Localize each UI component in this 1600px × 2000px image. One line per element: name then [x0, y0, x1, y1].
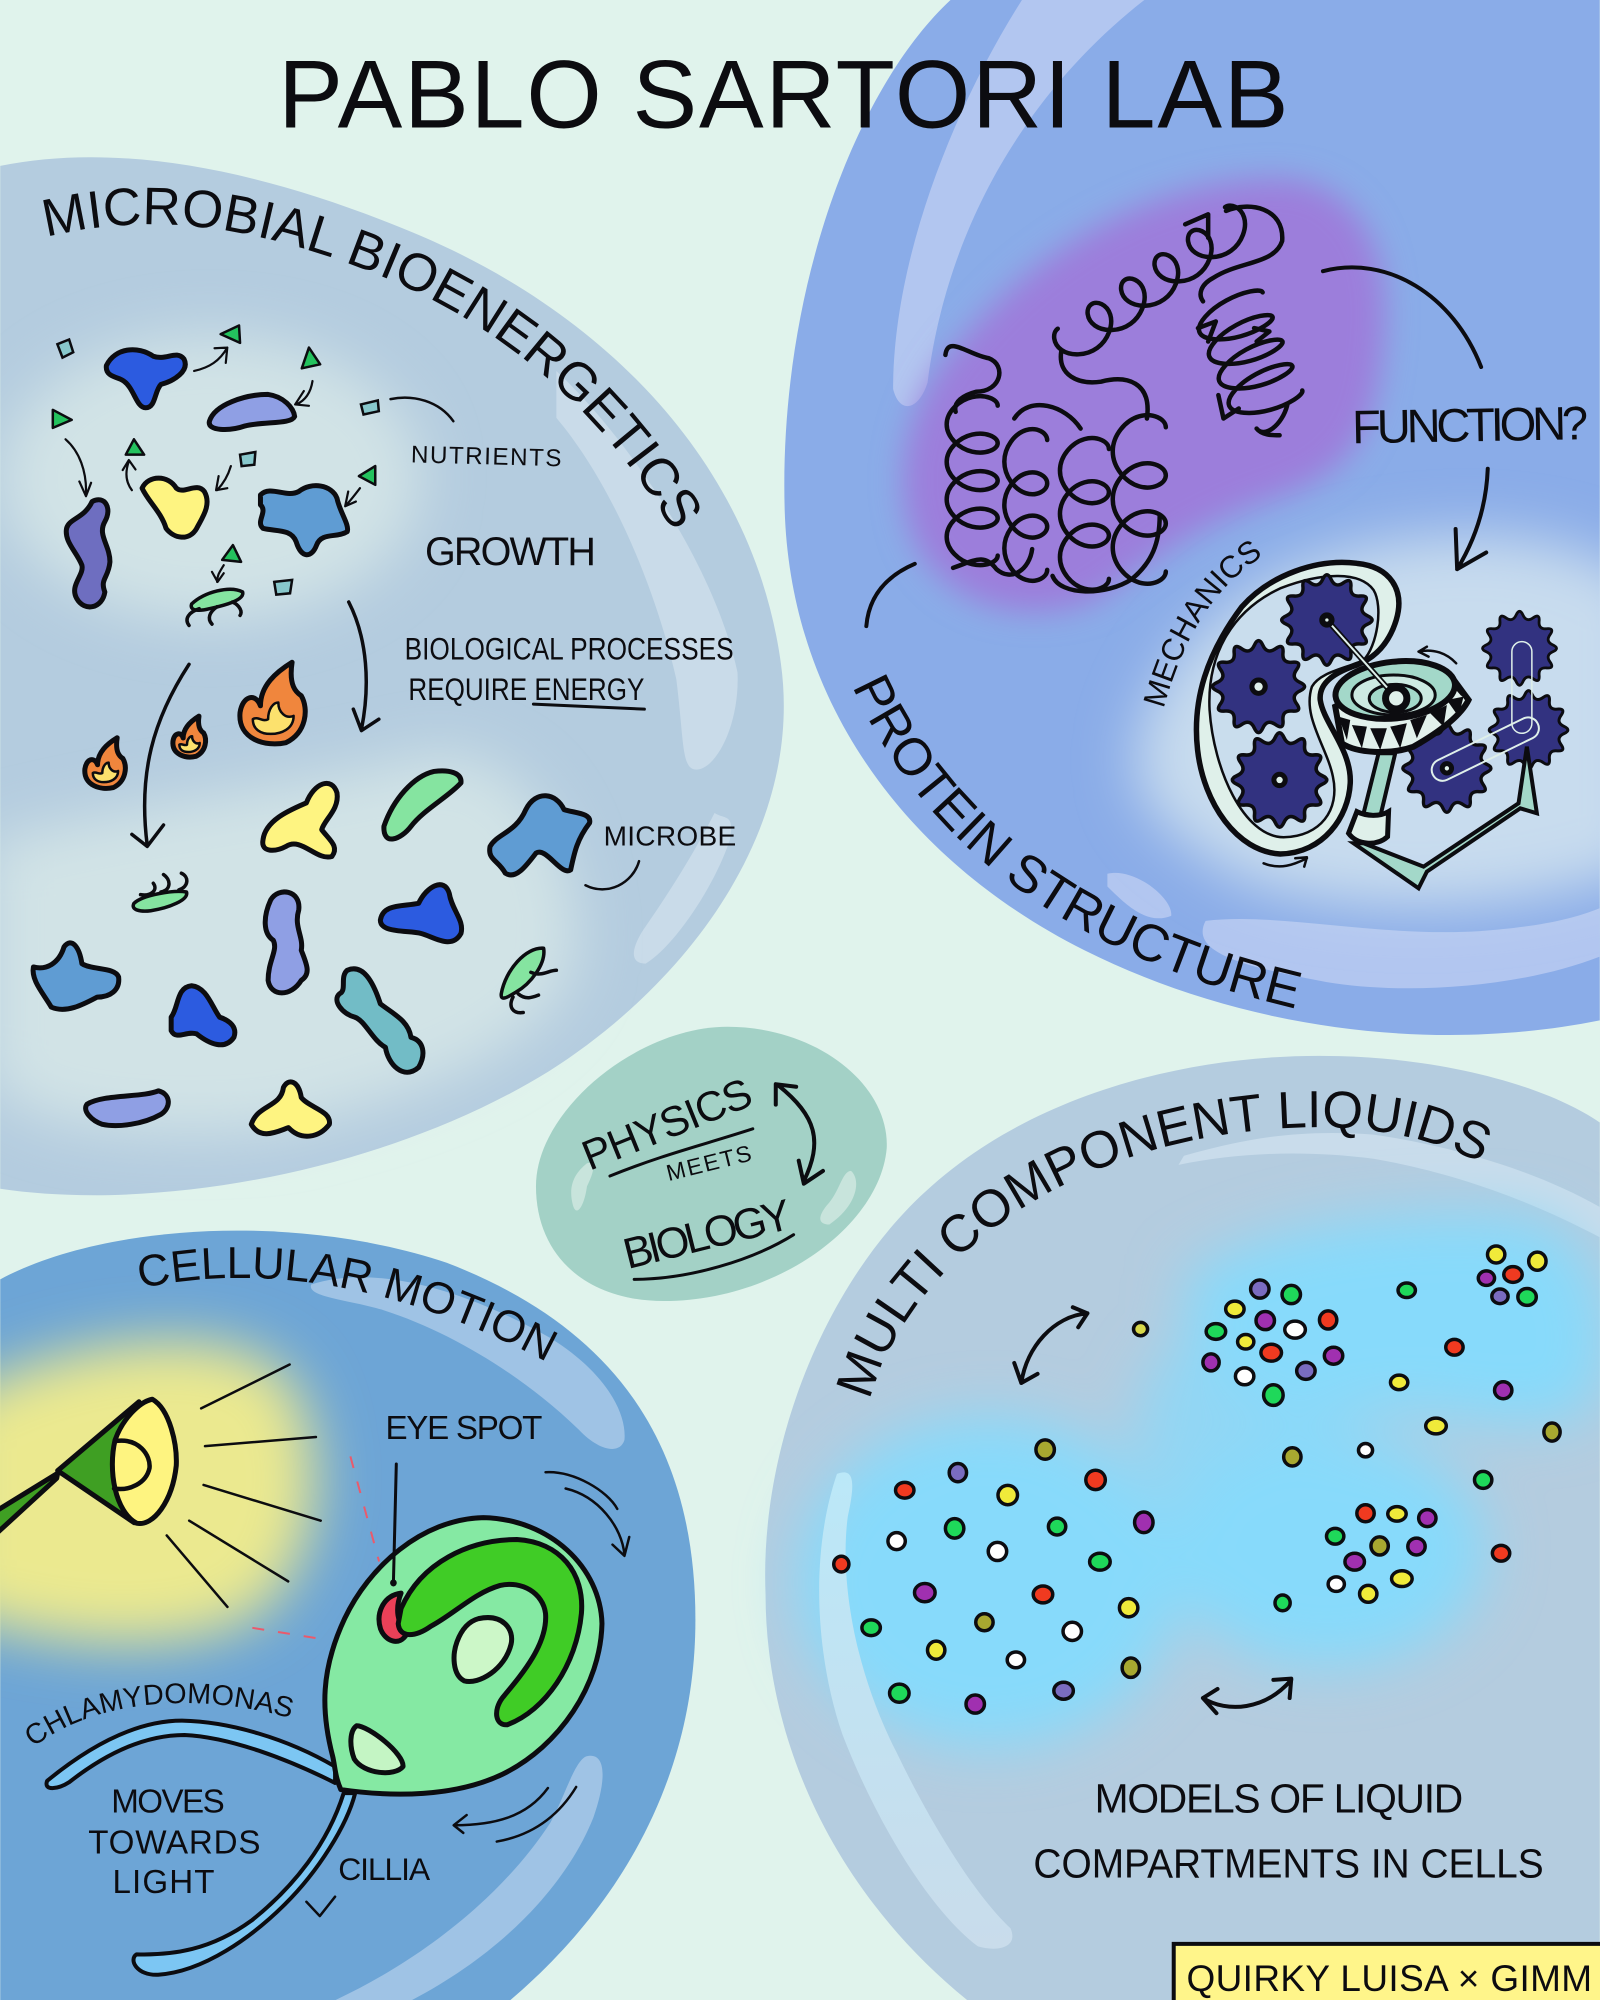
upper pale glow [0, 335, 421, 621]
crown gear rings [1352, 675, 1435, 715]
microbe: yellow lower [251, 1082, 330, 1136]
protein panel bubble [784, 0, 1600, 1035]
nucleus [454, 1618, 512, 1682]
red dashed light cone [252, 1456, 379, 1639]
arrow: energy to right colony [349, 602, 379, 731]
helix 1 [947, 396, 998, 565]
rod core [1327, 620, 1395, 697]
microbe: small green with legs [187, 589, 243, 625]
panel: microbial bioenergetics [0, 157, 784, 1196]
credit banner [1174, 1944, 1600, 2000]
helix 5 [1049, 201, 1256, 366]
label: mechanics: MECHANICS [1144, 541, 1260, 706]
eye spot pointer [393, 1464, 396, 1582]
gear 3 [1232, 733, 1327, 827]
gear 4 [1403, 724, 1491, 812]
panel: cellular motion [0, 1230, 696, 2000]
protein panel lower highlight [1107, 873, 1600, 988]
pin link diagonal [1428, 714, 1542, 784]
nutrients connector [391, 398, 453, 421]
dots: cluster upper right [1398, 1246, 1546, 1305]
microbe: dark blue lobed [380, 885, 462, 942]
centre highlights [571, 1163, 856, 1224]
microbe: large yellow [263, 783, 337, 857]
crown gear teeth base [1335, 675, 1469, 752]
small arrow lower [1264, 857, 1307, 867]
microbe: mid blue star [33, 943, 119, 1009]
gear 6 [1489, 691, 1568, 769]
mechanics machine illustration [1196, 562, 1568, 888]
double arrow lower [1203, 1679, 1291, 1713]
cellular highlights [311, 1277, 625, 2000]
linkage arms [1354, 747, 1537, 888]
flagellum left [46, 1721, 335, 1788]
arrow: function to mechanics top [1323, 267, 1481, 367]
microbe: dark blue blob [171, 986, 235, 1045]
title: PABLO SARTORI LAB [278, 40, 1289, 149]
panel: multi component liquids [763, 1056, 1600, 2000]
crown gear teeth [1339, 677, 1464, 750]
caption line 2: COMPARTMENTS IN CELLS [1033, 1841, 1544, 1887]
chloroplast [398, 1540, 582, 1725]
double arrow [776, 1084, 823, 1184]
molecule dots [834, 1246, 1560, 1713]
label: microbe: MICROBE [604, 821, 736, 852]
arrow: energy to left colony [132, 664, 189, 846]
double arrow upper [1014, 1307, 1087, 1383]
gear 2 [1213, 641, 1305, 733]
crown gear top disc [1333, 656, 1458, 724]
rotation arrow upper [546, 1472, 629, 1556]
gear 1 [1282, 575, 1372, 665]
microbe: mid blue [260, 486, 348, 555]
flame large [240, 662, 305, 744]
microbe: periwinkle wavy [265, 892, 307, 993]
mechanics light glow [1135, 535, 1600, 907]
droplet left [797, 1416, 1180, 1747]
microbes [33, 325, 639, 1136]
vacuole [351, 1726, 403, 1773]
microbe: green rod [384, 771, 461, 839]
droplet middle [1167, 1432, 1486, 1667]
cilia tick pointer [306, 1897, 335, 1916]
machine belt [1196, 562, 1399, 854]
lamp lens [112, 1399, 176, 1524]
microbe: dark blue [106, 350, 185, 408]
flame centre [173, 716, 206, 757]
label: chlamydomonas: CHLAMYDOMONAS [26, 1683, 293, 1744]
banner box [1174, 1944, 1600, 2000]
moves: MOVES [111, 1783, 225, 1820]
helix 6 [1192, 286, 1305, 424]
microbe connector [585, 861, 639, 889]
biology underline [634, 1235, 794, 1279]
helices [945, 201, 1305, 591]
label: require energy: REQUIRE ENERGY [408, 671, 644, 707]
label: moves towards light [88, 1783, 260, 1901]
microbe: green with tails [501, 948, 556, 1013]
hub [1386, 688, 1407, 709]
panel: protein structure [746, 0, 1600, 1075]
multi left highlight [819, 1472, 1012, 1949]
cell body [325, 1518, 602, 1794]
flagellum bottom [133, 1793, 355, 1975]
label: eye spot: EYE SPOT [385, 1410, 542, 1447]
microbe: yellow [142, 478, 207, 537]
multi top highlight [1179, 1133, 1600, 1238]
label: function: FUNCTION? [1352, 397, 1589, 454]
microbial panel bubble [0, 157, 784, 1195]
heading: multi component liquids: MULTI COMPONENT LIQUIDS [836, 1091, 1490, 1396]
helix 2 [1004, 429, 1047, 581]
purple protein glow [903, 179, 1385, 612]
energy underline [533, 704, 644, 709]
centre bubble [536, 1027, 887, 1301]
microbe: labelled mid blue [490, 796, 590, 875]
hub top pin [1322, 615, 1332, 625]
pillar base [1349, 812, 1389, 843]
dots: cluster top [1134, 1280, 1343, 1405]
microbe: teal wavy [337, 969, 423, 1072]
nutrients: squares [57, 340, 379, 595]
banner text: QUIRKY LUISA × GIMM [1186, 1958, 1592, 1999]
label: growth: GROWTH [425, 530, 596, 574]
eye spot pointer dot [390, 1579, 397, 1586]
small arrow upper [1419, 647, 1456, 663]
cellular panel bubble [0, 1231, 695, 2000]
physics underline [610, 1129, 753, 1176]
helix 4 [1113, 415, 1166, 584]
arrow: function down to mechanics [1456, 469, 1488, 569]
protein panel top highlight [893, 0, 1144, 406]
gear axle holes [1252, 680, 1452, 786]
label: physics: PHYSICS [575, 1069, 758, 1179]
rod [1327, 620, 1395, 697]
belt inner space [1209, 576, 1378, 837]
lamp arm [0, 1473, 58, 1534]
heading: cellular motion: CELLULAR MOTION [139, 1247, 558, 1360]
heading: microbial bioenergetics: MICROBIAL BIOENERGETICS [43, 188, 700, 526]
blue droplets glow [797, 1214, 1600, 1747]
microbial highlights [556, 371, 738, 964]
helix connectors [945, 207, 1287, 591]
lamp cone [58, 1402, 139, 1523]
dots: free molecules [1275, 1339, 1560, 1611]
label: biology: BIOLOGY [619, 1191, 796, 1279]
flame left [85, 738, 125, 788]
gear 5 [1483, 611, 1557, 685]
towards: TOWARDS [88, 1824, 260, 1861]
droplet connector [1135, 1327, 1327, 1531]
lamp bulb [114, 1441, 150, 1489]
pillar [1364, 753, 1395, 817]
helix 3 [1060, 438, 1109, 590]
heading: protein structure: PROTEIN STRUCTURE [854, 674, 1302, 1008]
pin link vertical [1512, 642, 1532, 733]
microbe: periwinkle rod lower [86, 1091, 168, 1126]
multi panel bubble [765, 1056, 1600, 2000]
dots: cluster lower right [1326, 1505, 1436, 1602]
nutrients: triangles [53, 325, 375, 562]
label: biological processes: BIOLOGICAL PROCESSES [405, 630, 734, 666]
label: cillia: CILLIA [338, 1851, 431, 1887]
microbe: periwinkle rod [209, 394, 295, 429]
droplet upper [1186, 1214, 1600, 1425]
rotation arrow lower [454, 1787, 576, 1842]
label: nutrients: NUTRIENTS [411, 441, 562, 472]
small arrows [66, 348, 360, 582]
microbe: purple wavy [66, 500, 110, 607]
panel: physics meets biology [536, 1027, 887, 1301]
eye spot [379, 1593, 407, 1641]
light: LIGHT [112, 1864, 215, 1901]
light rays [167, 1365, 321, 1607]
microbe: mini green with legs [133, 873, 187, 911]
lower pale glow [0, 753, 576, 1133]
arrow: mechanics back to structure [866, 564, 915, 626]
yellow light glow [0, 1341, 315, 1643]
dots: large droplet [834, 1440, 1153, 1713]
label: meets: MEETS [664, 1140, 754, 1186]
caption line 1: MODELS OF LIQUID [1095, 1775, 1463, 1821]
